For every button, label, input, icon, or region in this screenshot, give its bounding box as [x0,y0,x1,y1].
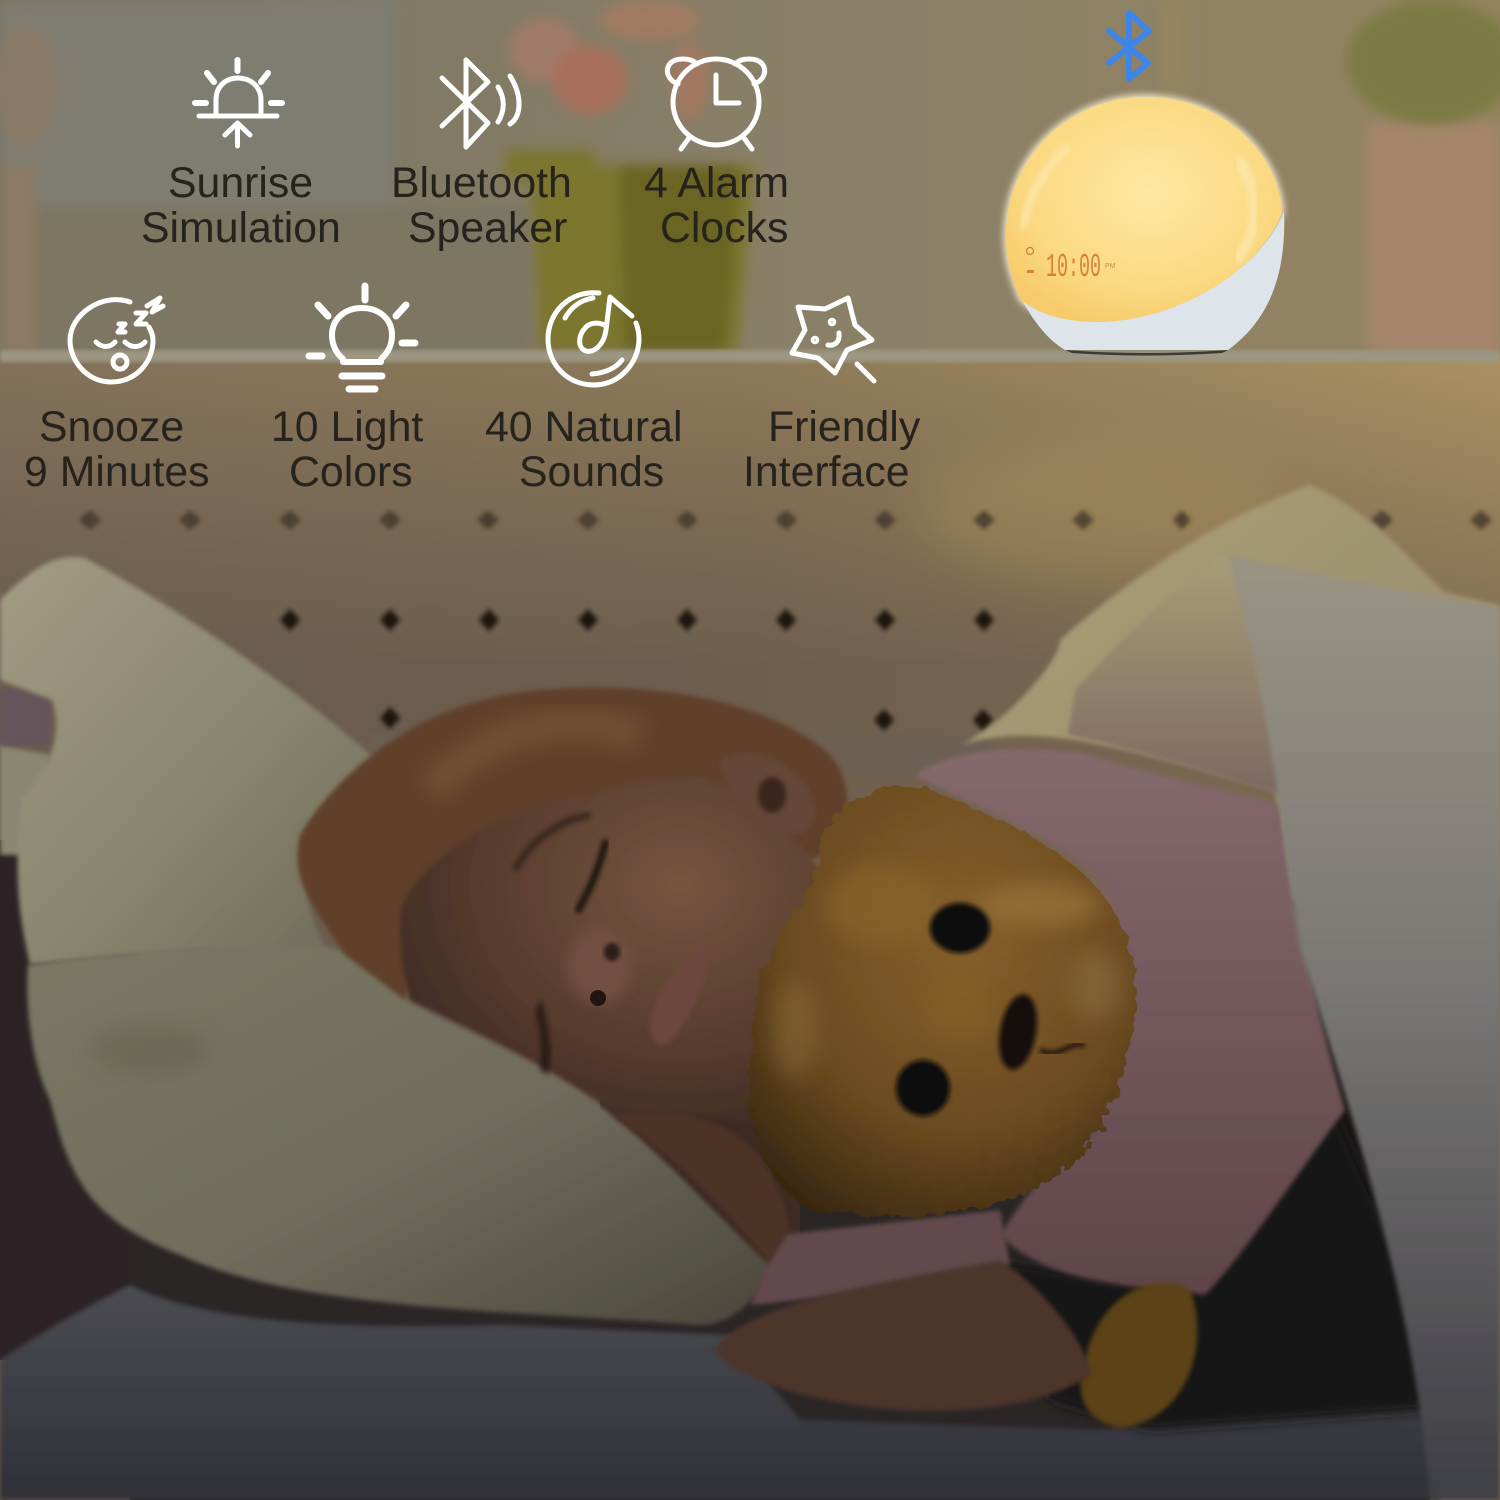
forearm under cheek [610,1112,790,1262]
middle blanket layer [1068,555,1283,795]
clock display: PM [1105,263,1116,270]
label: 40 Natural Sounds: 40 Natural [485,403,682,451]
clock display [1026,248,1116,286]
label: Bluetooth Speaker: Speaker [408,204,567,252]
label: Bluetooth Speaker: Bluetooth [391,159,572,207]
lamp glow [1006,97,1282,322]
label: 4 Alarm Clocks: Clocks [660,204,788,252]
illustration: sleeping child with teddy bear [0,485,1500,1500]
label: 10 Light Colors: Colors [289,448,413,496]
nose [567,927,633,1003]
teddy fur highlights [773,865,1121,1080]
globe highlights [1024,148,1066,225]
dark shadow under arm [1000,1100,1430,1430]
flower pot and plants [0,0,1500,352]
hair [297,688,847,1000]
label: 40 Natural Sounds: Sounds [519,448,664,496]
label: Friendly Interface: Interface [743,448,910,496]
icon: sunrise [195,60,282,146]
feature: bluetooth speaker [391,60,572,252]
product: wake-up light clock [1006,97,1284,356]
label: Sunrise Simulation: Simulation [141,204,341,252]
label: 4 Alarm Clocks: 4 Alarm [644,159,789,207]
shelf edge [0,350,1500,362]
label: Snooze 9 Minutes: Snooze [39,403,184,451]
icon: star face [792,298,874,381]
pillow shadow crease [90,1026,210,1074]
clock display: 10:00 [1046,249,1101,286]
glowing globe [1006,97,1282,322]
eye and brow [515,815,590,870]
headboard ledge [370,735,990,775]
white base [1022,212,1284,350]
upper blanket [960,485,1500,900]
feature: snooze 9 minutes [24,298,210,496]
icon: music disc [548,293,639,385]
feature: 10 light colors [271,286,423,496]
icon: bluetooth speaker [442,60,519,147]
ear [720,754,815,833]
lower pillow [27,946,770,1325]
hand [715,1260,1092,1411]
label: Sunrise Simulation: Sunrise [168,159,313,207]
pajama body and arm [915,749,1345,1295]
teddy lower foot [1081,1283,1197,1428]
bed sheet [0,1285,1440,1500]
dark bed base behind figures [0,840,140,1360]
upper pillow [0,557,382,965]
icon: sleeping face [70,298,163,382]
label: Friendly Interface: Friendly [768,403,921,451]
hair strands highlight [430,724,640,790]
face [400,777,830,1135]
icon: light bulb [309,286,415,389]
icon: alarm clock [667,59,765,149]
right blanket fold [1228,555,1500,1500]
wall diamonds [79,510,1492,530]
label: 10 Light Colors: 10 Light [271,403,423,451]
teddy head [750,786,1137,1216]
teddy eyes and nose [930,903,990,953]
feature: 40 natural sounds [485,293,682,496]
label: Snooze 9 Minutes: 9 Minutes [24,448,210,496]
mouth [650,935,707,1045]
feature: sunrise simulation [141,60,341,252]
feature: friendly interface [743,298,921,496]
icon: blue bluetooth symbol [1109,13,1149,79]
pajama cuff [750,1210,1010,1305]
feature: 4 alarm clocks [644,59,789,252]
